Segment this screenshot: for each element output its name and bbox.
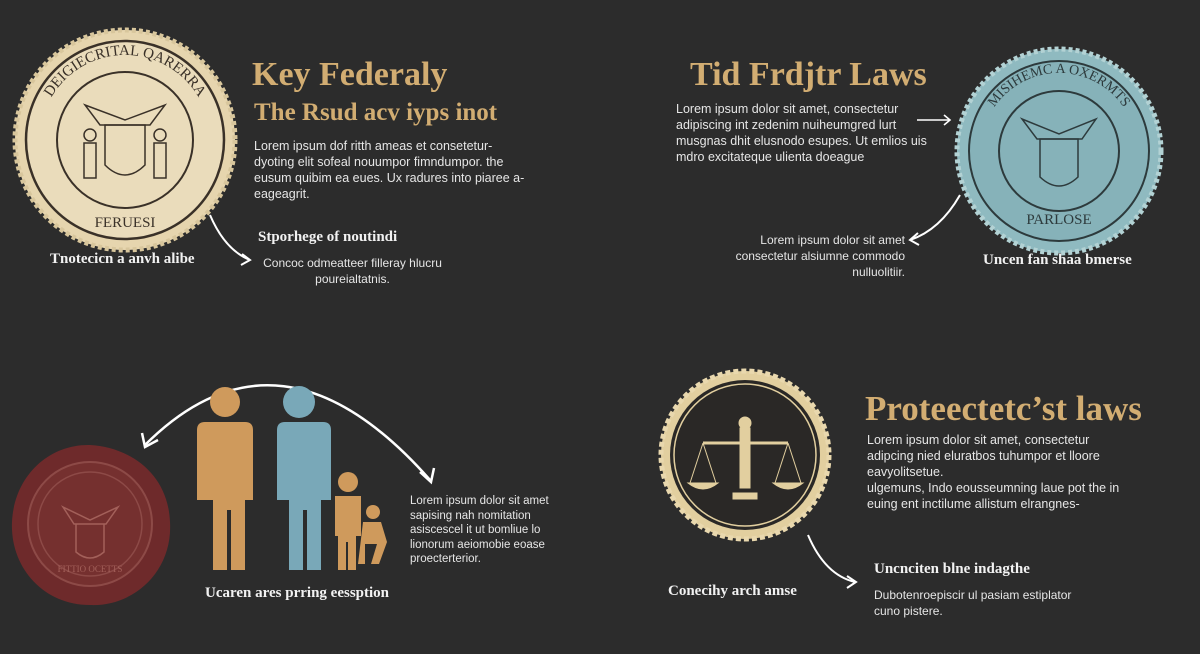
title top-right: Tid Frdjtr Laws [690, 56, 927, 93]
text small bottom-right: Dubotenroepiscir ul pasiam estiplator cuno pistere. [874, 588, 1071, 618]
label under seal: Tnotecicn a anvh alibe [50, 251, 195, 267]
text bottom-right: Lorem ipsum dolor sit amet, consectetur adipcing nied eluratbos tuhumpor et lloore eavyolitsetue. [867, 433, 1100, 479]
seal: top-left cream [12, 28, 238, 252]
text top-right: Lorem ipsum dolor sit amet, consectetur adipiscing int zedenim nuiheumgred lurt musgnas dhit elusnodo esupes. Ut emlios uis mdro excitateque ulienta doeague [676, 102, 927, 164]
seal: maroon: FITTIO OCETTS [58, 564, 122, 574]
text bottom-right: ulgemuns, Indo eousseumning laue pot the in euing ent inctilume allistum elrangnes- [867, 481, 1119, 511]
seal: top-left cream: DEIGIECRITAL QARERRA [43, 45, 204, 98]
label scales: Conecihy arch amse [668, 583, 797, 599]
arrow top-left [209, 214, 252, 266]
seal: blue: MISIHEMC A OXERMTS [987, 64, 1130, 107]
text mid-right: Lorem ipsum dolor sit amet consectetur alsiumne commodo nulluolitiir. [736, 233, 905, 279]
subheading bottom-right: Uncnciten blne indagthe [874, 561, 1030, 577]
seal: top-left cream: FERUESI [95, 215, 155, 231]
title: Key Federaly: Key Federaly [252, 56, 447, 93]
text family: Lorem ipsum dolor sit amet sapising nah nomitation asiscescel it ut bomliue lo lionorum aeiomobie eoase proecterterior. [410, 495, 549, 565]
label family: Ucaren ares prring eessption [205, 585, 389, 601]
text block top-left: Lorem ipsum dof ritth ameas et consetetur-dyoting elit sofeal nouumpor fimndumpor. the eusum quibim ea eues. Ux radures into piaree a-eageagrit. [254, 139, 524, 201]
subtitle: The Rsud acv iyps inot [254, 99, 497, 126]
seal: maroon [12, 445, 170, 606]
subheading top-left: Stporhege of noutindi [258, 229, 397, 245]
seal: scales [658, 368, 832, 542]
arc arrow family [140, 384, 436, 484]
arrow blue seal curved [908, 194, 961, 246]
text bottom-right [867, 433, 1119, 511]
seal: blue: PARLOSE [1026, 212, 1092, 228]
arrow to blue seal [917, 114, 952, 126]
text small top-left: Concoc odmeatteer filleray hlucru poureialtatnis. [263, 256, 442, 286]
title bottom-right: Proteectetc’st laws [865, 389, 1142, 428]
icon: family figures [197, 386, 387, 570]
arrow bottom-right [807, 534, 858, 589]
seal: blue [954, 46, 1164, 256]
label blue seal: Uncen fan shaa bmerse [983, 252, 1132, 268]
